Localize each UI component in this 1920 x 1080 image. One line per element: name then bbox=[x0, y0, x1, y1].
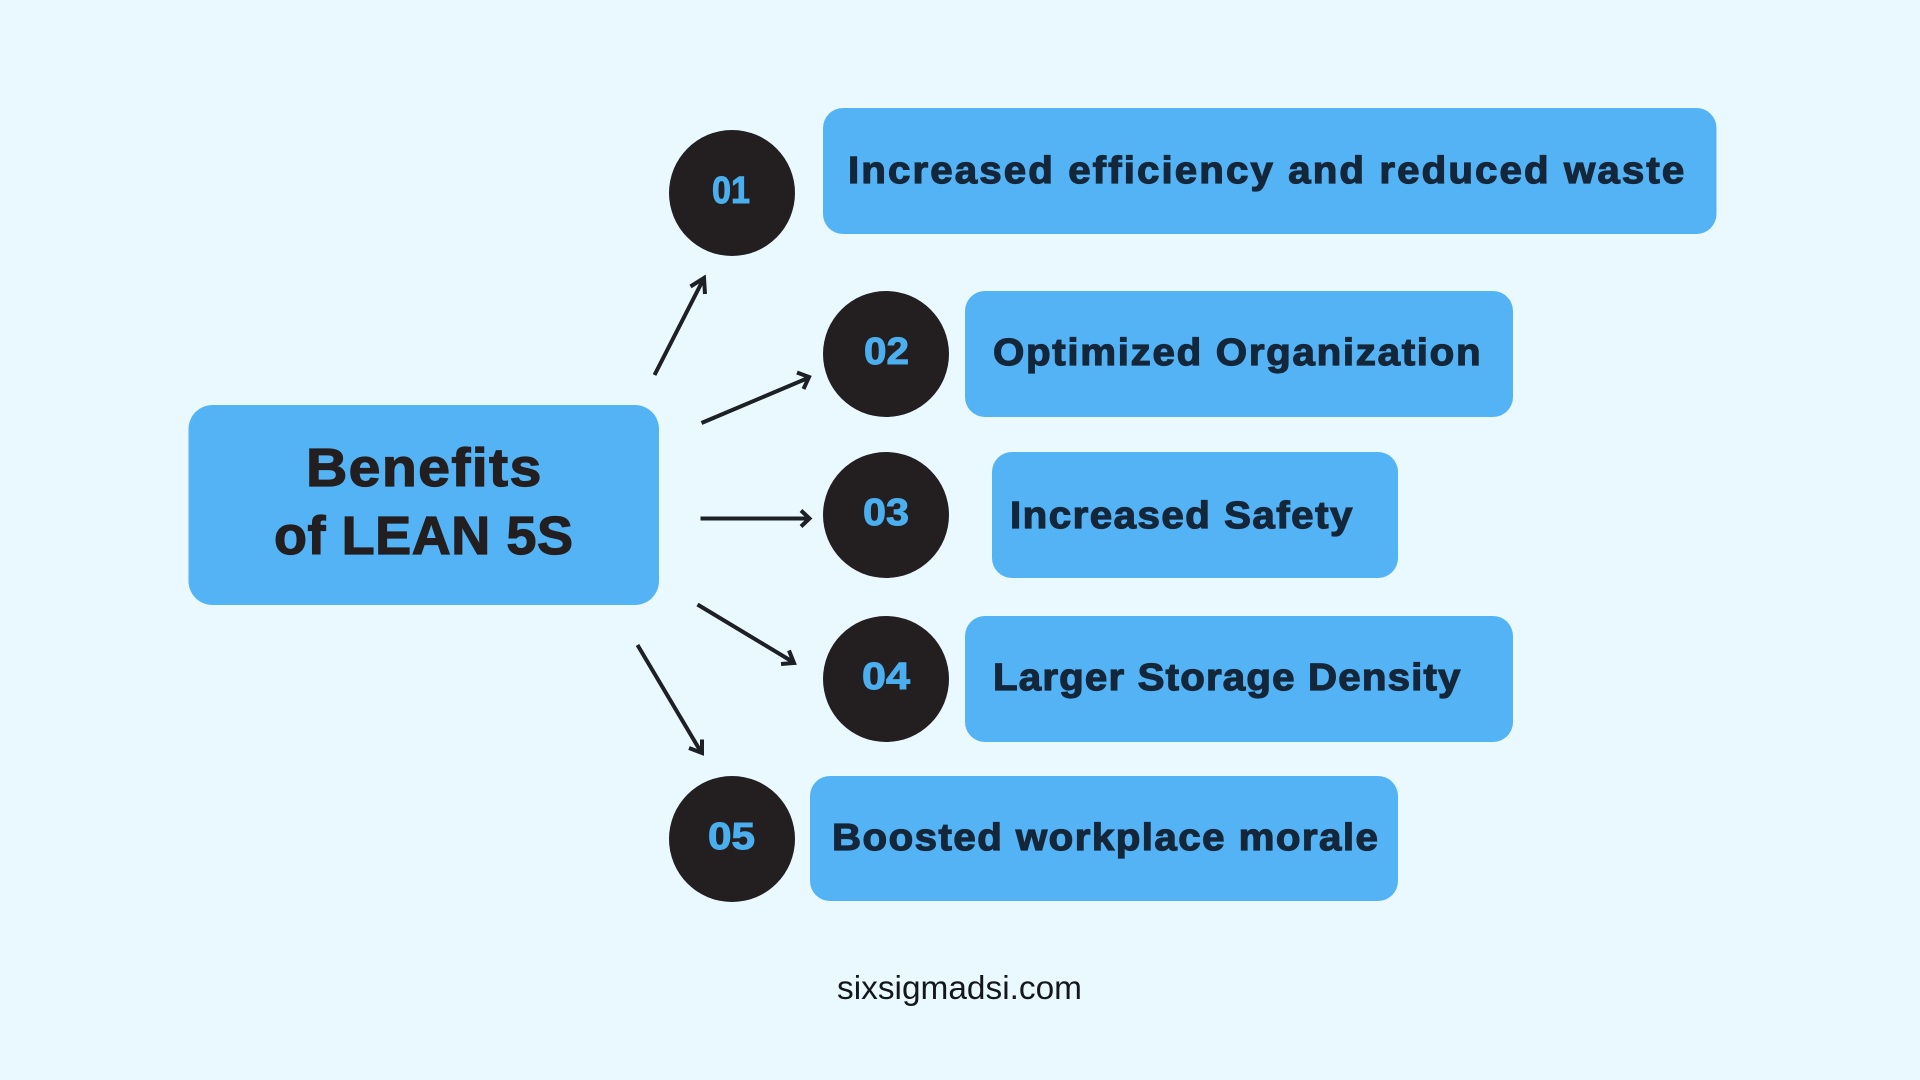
bar 05 bbox=[810, 776, 1398, 901]
number badge 03 bbox=[823, 452, 949, 578]
heading: Benefits: Benefits bbox=[306, 437, 541, 498]
number badge 01 bbox=[669, 130, 795, 256]
bar 05: Boosted workplace morale bbox=[832, 817, 1378, 859]
bar 02 bbox=[965, 291, 1513, 417]
panel: Benefits of LEAN 5S bbox=[188, 405, 659, 605]
number badge 03: 03 bbox=[863, 492, 909, 534]
item 01: Increased efficiency and reduced waste bbox=[669, 108, 1716, 256]
number badge 02: 02 bbox=[864, 331, 909, 373]
number badge 04: 04 bbox=[862, 656, 910, 698]
arrow: to item 02 bbox=[702, 372, 809, 423]
bar 03: Increased Safety bbox=[1010, 495, 1353, 537]
bar 04 bbox=[965, 616, 1513, 742]
item 04: Larger Storage Density bbox=[823, 616, 1513, 742]
arrow: to item 01 bbox=[654, 278, 705, 375]
item 03: Increased Safety bbox=[823, 452, 1398, 578]
number badge 05: 05 bbox=[708, 816, 755, 858]
number badge 02 bbox=[823, 291, 949, 417]
bar 01: Increased efficiency and reduced waste bbox=[848, 150, 1684, 192]
number badge 05 bbox=[669, 776, 795, 902]
footer: website: sixsigmadsi.com bbox=[837, 969, 1082, 1006]
number badge 01: 01 bbox=[712, 170, 750, 212]
arrow: to item 03 bbox=[700, 510, 810, 526]
bar 04: Larger Storage Density bbox=[993, 657, 1461, 699]
bar 02: Optimized Organization bbox=[993, 332, 1481, 374]
bar 03 bbox=[992, 452, 1398, 578]
number badge 04 bbox=[823, 616, 949, 742]
arrow: to item 04 bbox=[698, 604, 794, 664]
item 02: Optimized Organization bbox=[823, 291, 1513, 417]
arrow: to item 05 bbox=[638, 645, 702, 753]
heading: of LEAN 5S: of LEAN 5S bbox=[274, 506, 573, 566]
item 05: Boosted workplace morale bbox=[669, 776, 1398, 902]
bar 01 bbox=[823, 108, 1716, 234]
